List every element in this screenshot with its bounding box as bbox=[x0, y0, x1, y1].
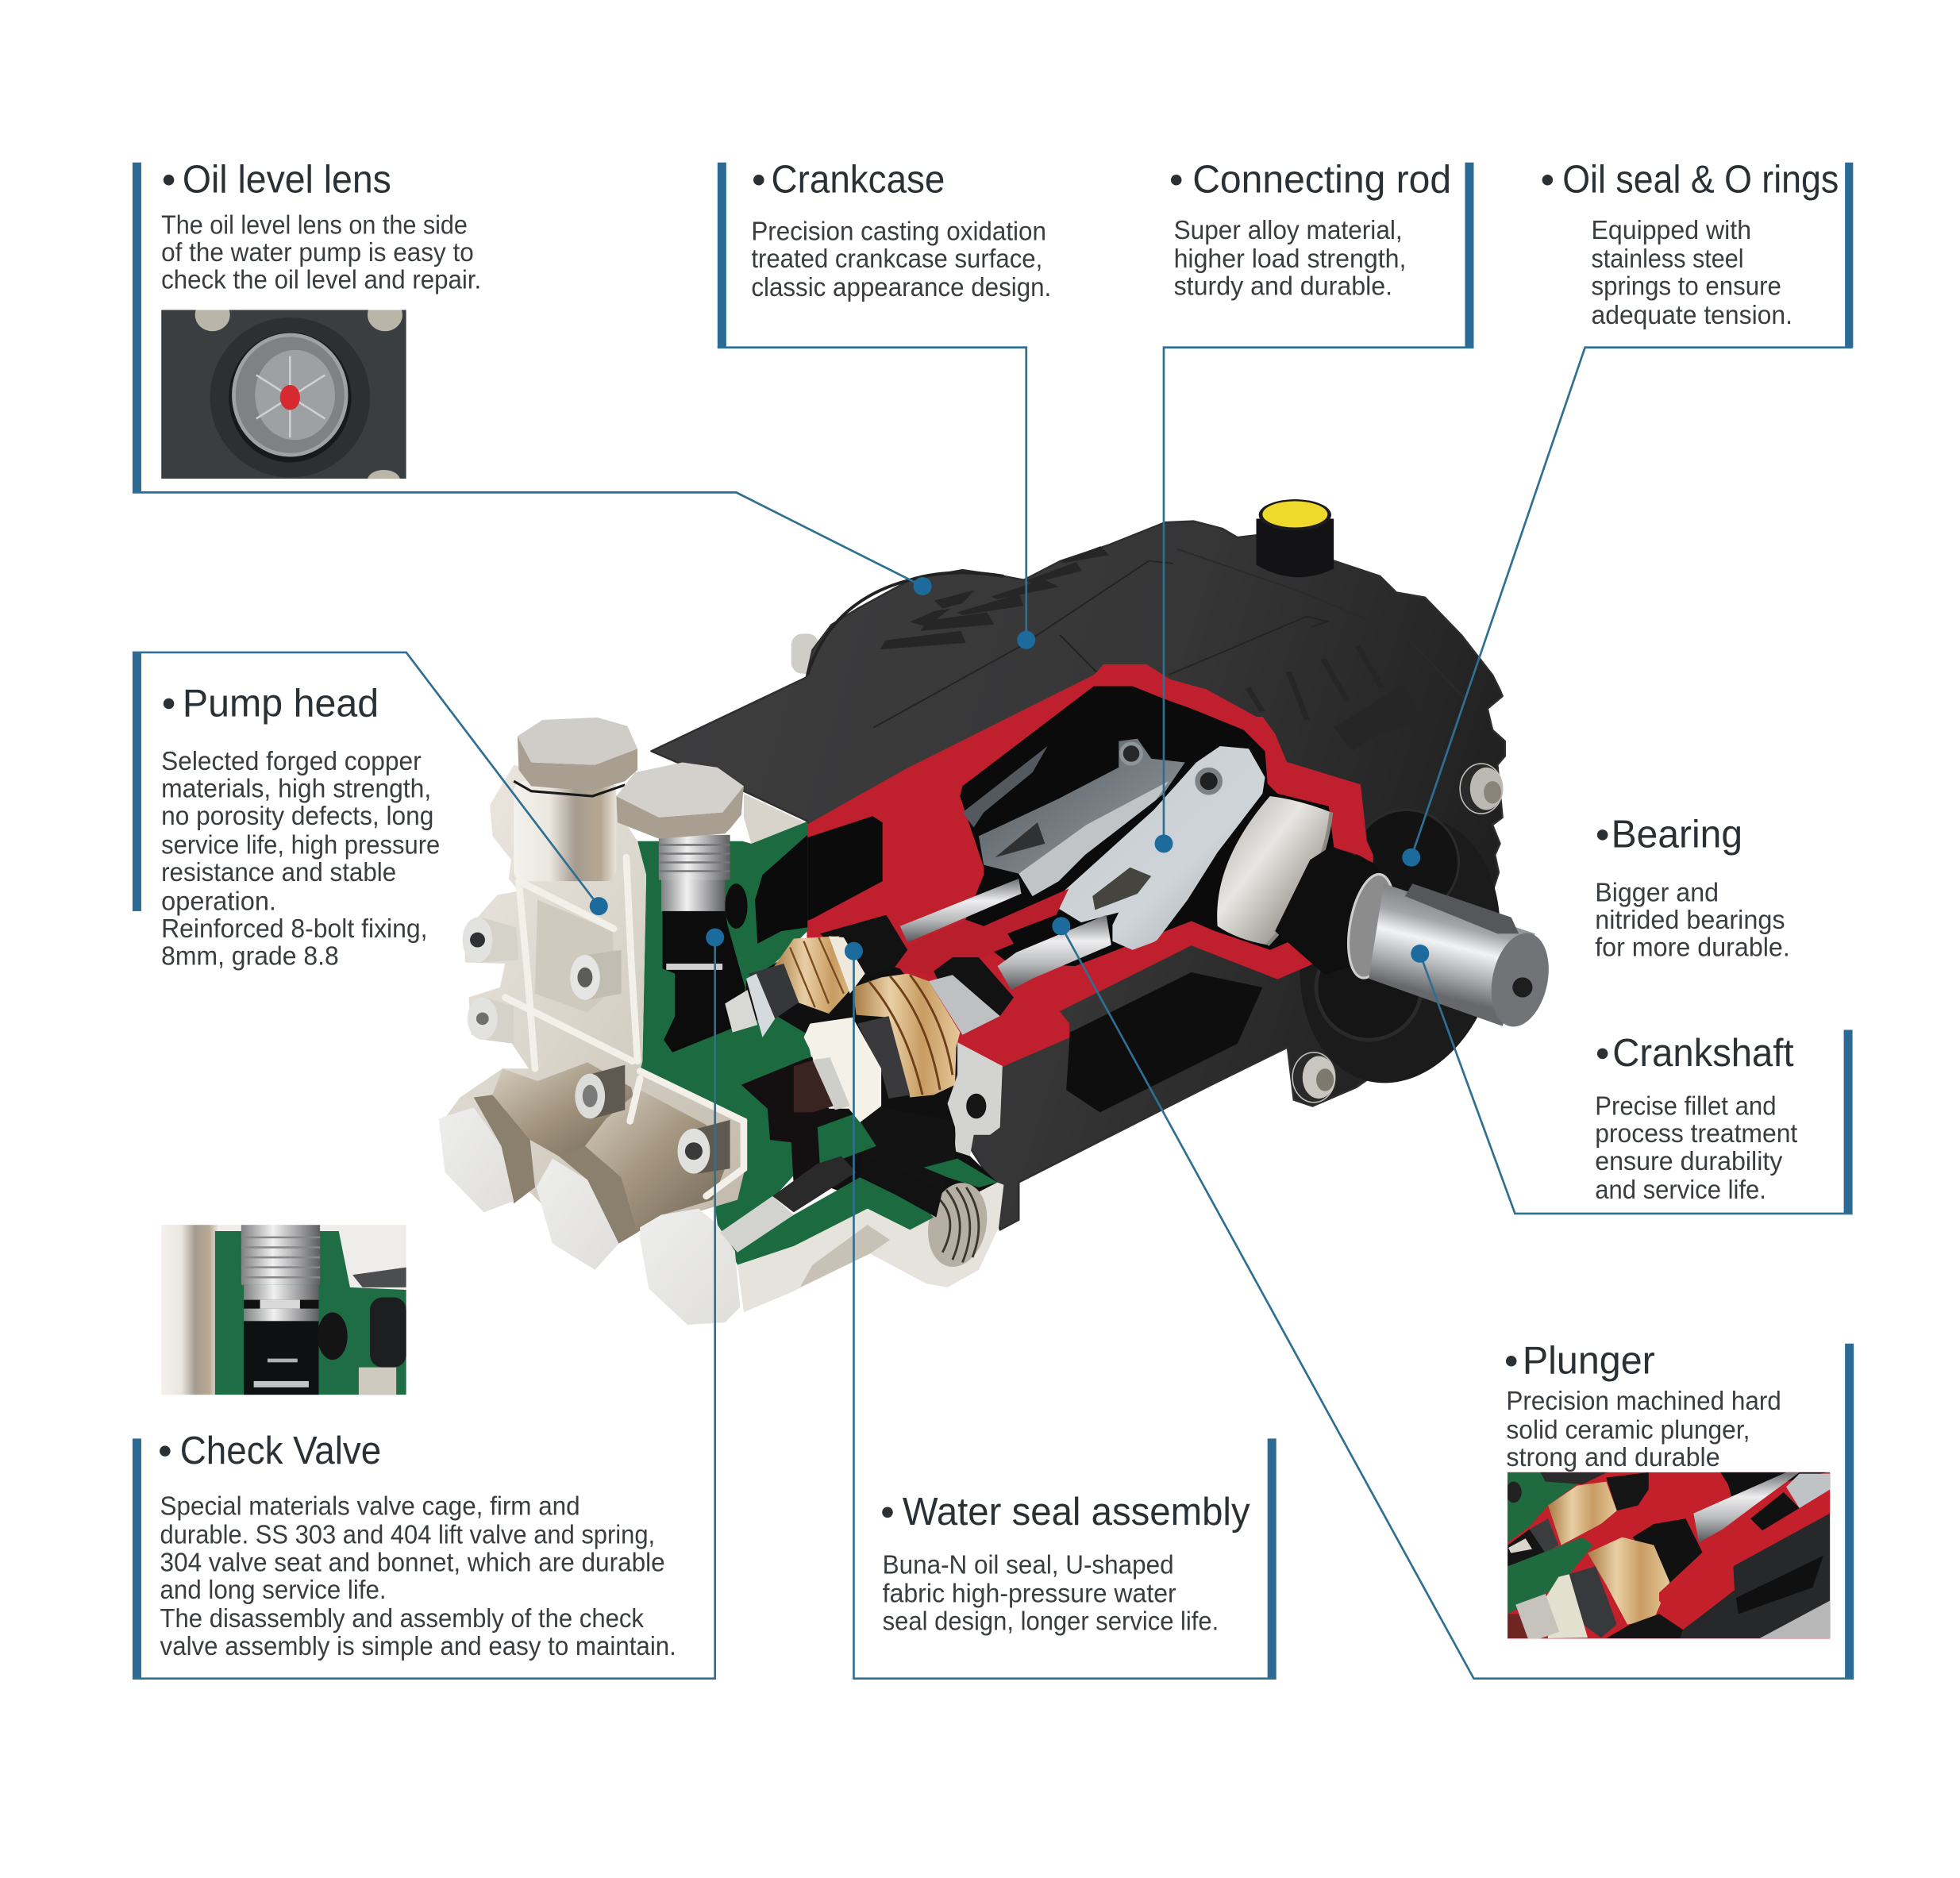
rear stud bbox=[791, 633, 818, 674]
oil seal bbox=[1275, 846, 1388, 975]
pocket beside valve bbox=[725, 883, 748, 929]
leader line bbox=[1154, 163, 1473, 852]
leader line bbox=[133, 163, 932, 595]
description: Selected forged copper bbox=[161, 747, 422, 776]
description: Precision machined hard bbox=[1506, 1387, 1781, 1416]
shaft key bbox=[1405, 883, 1519, 933]
callout: Crankshaft bbox=[1411, 945, 1853, 1214]
shaft end face bbox=[1483, 928, 1557, 1032]
lower red band front bbox=[957, 921, 1330, 1066]
leader line bbox=[133, 652, 608, 915]
small valve spring bbox=[720, 1156, 857, 1253]
thumbnail: oil level lens bbox=[161, 310, 406, 479]
filler cap bbox=[1256, 499, 1334, 577]
leader line bbox=[845, 942, 1277, 1679]
valve thread bbox=[241, 1225, 320, 1285]
nickel head body bbox=[440, 765, 745, 1231]
heading: Oil seal & O rings bbox=[1562, 158, 1839, 201]
callout: Water seal assembly bbox=[845, 942, 1277, 1679]
heading: Pump head bbox=[183, 682, 379, 725]
bottom black bbox=[1606, 1614, 1683, 1638]
description: durable. SS 303 and 404 lift valve and spring, bbox=[160, 1521, 655, 1550]
slot under upper rod bbox=[968, 898, 1029, 926]
description: ensure durability bbox=[1595, 1147, 1783, 1176]
red housing cut section bbox=[807, 665, 1373, 1066]
description bbox=[1595, 1092, 1797, 1205]
description: springs to ensure bbox=[1591, 272, 1781, 302]
white collar bbox=[1546, 1574, 1588, 1638]
leader line bbox=[718, 163, 1035, 649]
description: stainless steel bbox=[1591, 244, 1744, 274]
description bbox=[161, 747, 440, 972]
lens ring bbox=[233, 335, 346, 455]
top green bbox=[1508, 1472, 1577, 1542]
description: Bigger and bbox=[1595, 878, 1719, 907]
big black ring bbox=[1633, 1518, 1704, 1585]
description: adequate tension. bbox=[1591, 301, 1792, 330]
shaft bbox=[1369, 883, 1535, 1026]
description: treated crankcase surface, bbox=[751, 244, 1042, 274]
rear cap outline bbox=[807, 572, 1003, 675]
description: operation. bbox=[161, 887, 276, 916]
rear connecting rod bbox=[962, 739, 1185, 896]
callout: Check Valve bbox=[133, 928, 724, 1679]
small water seal bbox=[725, 936, 865, 1037]
heading: Connecting rod bbox=[1192, 158, 1451, 201]
description: 8mm, grade 8.8 bbox=[161, 942, 339, 972]
arm block bbox=[1786, 1474, 1830, 1508]
outlet hex plugs bbox=[439, 1095, 740, 1325]
black interior behind seals bbox=[745, 940, 1000, 1218]
housing bolts bbox=[1292, 764, 1503, 1103]
heading: Check Valve bbox=[180, 1430, 381, 1472]
description: higher load strength, bbox=[1174, 244, 1406, 274]
crankcase body bbox=[651, 521, 1505, 1230]
description bbox=[160, 1491, 676, 1661]
description: Equipped with bbox=[1591, 216, 1751, 245]
description: of the water pump is easy to bbox=[161, 238, 474, 267]
plug one bbox=[514, 718, 637, 796]
bolts bbox=[195, 310, 402, 479]
callout: Oil seal and O rings bbox=[1402, 158, 1853, 867]
description: The oil level lens on the side bbox=[161, 210, 468, 240]
dark ring bbox=[1569, 1566, 1617, 1637]
front connecting rod bbox=[1059, 746, 1265, 950]
pocket bbox=[318, 1312, 348, 1360]
callout: Bearing bbox=[1595, 814, 1790, 963]
leader line bbox=[1402, 163, 1853, 867]
top black seal bbox=[1606, 1472, 1649, 1510]
description: Special materials valve cage, firm and bbox=[160, 1491, 580, 1521]
description bbox=[883, 1550, 1219, 1636]
callout: Pump head bbox=[133, 652, 608, 972]
bearing bbox=[1217, 796, 1331, 945]
callout: Crankcase bbox=[718, 158, 1051, 649]
description: materials, high strength, bbox=[161, 775, 431, 804]
description: sturdy and durable. bbox=[1174, 272, 1392, 302]
top right black bbox=[1720, 1472, 1827, 1497]
description bbox=[1591, 216, 1792, 330]
lower green bbox=[1508, 1537, 1593, 1614]
black channel by port bbox=[860, 1153, 942, 1218]
infographic: pump cutaway with callouts bbox=[132, 162, 1854, 1680]
heading: Oil level lens bbox=[183, 158, 391, 201]
lower plunger rod bbox=[998, 915, 1111, 990]
black T channel bbox=[741, 1048, 841, 1187]
lens dial bbox=[255, 350, 335, 440]
cylinder under plug one bbox=[514, 781, 616, 881]
threaded port bbox=[921, 1177, 995, 1272]
front face bracket bbox=[948, 1042, 1003, 1156]
description: fabric high-pressure water bbox=[883, 1580, 1176, 1609]
black slot in red block bbox=[763, 816, 883, 931]
pump head green section bbox=[637, 822, 813, 1265]
lower body recess bbox=[1066, 972, 1262, 1112]
wedge behind head bbox=[744, 794, 805, 844]
description bbox=[161, 210, 481, 295]
valve silver ring bbox=[666, 964, 722, 970]
callout: Connecting rod bbox=[1154, 158, 1473, 852]
heading: Crankcase bbox=[772, 158, 945, 201]
description: and long service life. bbox=[160, 1576, 387, 1605]
plunger seal rings bbox=[820, 915, 1014, 1035]
description: Precise fillet and bbox=[1595, 1092, 1777, 1122]
thumbnail: plunger detail bbox=[1506, 1470, 1834, 1642]
thumbnail: check valve detail bbox=[161, 1225, 406, 1395]
callout: Plunger bbox=[1052, 917, 1854, 1679]
red web between plungers bbox=[898, 889, 1069, 976]
heading: Water seal assembly bbox=[903, 1491, 1250, 1534]
description bbox=[1174, 216, 1406, 302]
red indicator bbox=[280, 385, 300, 410]
description: valve assembly is simple and easy to maintain. bbox=[160, 1632, 676, 1661]
right side recess bbox=[1334, 685, 1427, 751]
callout: Oil level lens bbox=[133, 158, 932, 595]
description: no porosity defects, long bbox=[161, 802, 433, 831]
leader line bbox=[1052, 917, 1854, 1679]
valve bore bbox=[663, 910, 745, 1053]
black slot bbox=[1750, 1492, 1800, 1530]
valve collar bbox=[244, 1285, 319, 1321]
red lower bbox=[1659, 1495, 1830, 1630]
heading: Crankshaft bbox=[1612, 1032, 1794, 1075]
lower green blocks bbox=[735, 1114, 998, 1265]
big brass bbox=[1588, 1537, 1669, 1625]
upper plunger rod bbox=[900, 879, 1021, 942]
discharge fitting bbox=[737, 1177, 1003, 1312]
crank cavity bbox=[960, 686, 1334, 966]
description bbox=[751, 217, 1051, 302]
head socket bolts bbox=[463, 918, 730, 1174]
description: seal design, longer service life. bbox=[883, 1607, 1219, 1636]
description: classic appearance design. bbox=[751, 273, 1051, 302]
description bbox=[1595, 878, 1790, 963]
description: Reinforced 8-bolt fixing, bbox=[161, 914, 428, 944]
top surface fins, panels and ribs bbox=[873, 546, 1465, 728]
leader line bbox=[133, 928, 724, 1679]
description bbox=[1506, 1387, 1781, 1472]
head casting ribs bbox=[505, 857, 744, 1196]
shaft collar bbox=[1342, 871, 1401, 982]
lens bezel bbox=[210, 317, 370, 478]
plug two bbox=[616, 763, 744, 839]
lower black behind seal bbox=[855, 1106, 957, 1191]
description: solid ceramic plunger, bbox=[1506, 1415, 1750, 1445]
description: Super alloy material, bbox=[1174, 216, 1403, 245]
valve black cage bbox=[244, 1321, 319, 1395]
description: resistance and stable bbox=[161, 858, 396, 887]
description: service life, high pressure bbox=[161, 830, 440, 860]
grey housing bbox=[352, 1268, 406, 1287]
description: Buna-N oil seal, U-shaped bbox=[883, 1550, 1174, 1580]
dark slot right bbox=[370, 1297, 406, 1368]
description: process treatment bbox=[1595, 1119, 1797, 1149]
leader line bbox=[1411, 945, 1853, 1214]
head lower shade bbox=[492, 900, 727, 1233]
black slot in green bbox=[755, 835, 807, 944]
description: for more durable. bbox=[1595, 933, 1790, 963]
large water seal bbox=[794, 974, 1000, 1122]
upper brass bbox=[1548, 1482, 1617, 1545]
description: nitrided bearings bbox=[1595, 906, 1785, 935]
lower right dark bbox=[1681, 1514, 1830, 1638]
description: strong and durable bbox=[1506, 1443, 1720, 1472]
heading: Plunger bbox=[1523, 1340, 1655, 1383]
description: The disassembly and assembly of the check bbox=[160, 1604, 644, 1634]
description: check the oil level and repair. bbox=[161, 266, 481, 295]
valve collar bbox=[661, 879, 725, 911]
pump illustration bbox=[439, 499, 1557, 1325]
silver rod bbox=[1693, 1472, 1800, 1542]
description: 304 valve seat and bonnet, which are durable bbox=[160, 1548, 665, 1577]
green body bbox=[215, 1231, 406, 1395]
crankshaft end housing bbox=[1273, 795, 1527, 1104]
valve thread bbox=[659, 835, 730, 880]
crankshaft assembly bbox=[1275, 846, 1557, 1032]
description: and service life. bbox=[1595, 1176, 1766, 1205]
description: Precision casting oxidation bbox=[751, 217, 1046, 246]
heading: Bearing bbox=[1612, 814, 1742, 856]
small dark pieces bbox=[1508, 1530, 1548, 1566]
